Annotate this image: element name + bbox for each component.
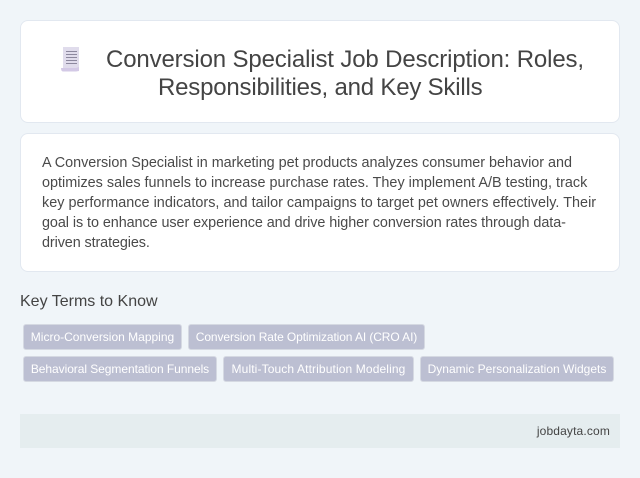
description text: key performance indicators, and tailor campaigns to target pet owners effectively. Their: [42, 195, 596, 211]
description text: driven strategies.: [42, 235, 150, 251]
description text: A Conversion Specialist in marketing pet products analyzes consumer behavior and: [42, 155, 572, 171]
tag: Micro-Conversion Mapping: [31, 330, 174, 344]
footer brand: jobdayta.com: [537, 424, 610, 438]
tag: Behavioral Segmentation Funnels: [31, 362, 209, 376]
panel: title card: [20, 20, 620, 123]
tag: [223, 356, 414, 382]
description text: [42, 155, 596, 251]
footer bar: [20, 414, 620, 448]
tag: Multi-Touch Attribution Modeling: [232, 362, 405, 376]
tag: Conversion Rate Optimization AI (CRO AI): [196, 330, 417, 344]
description text: goal is to enhance user experience and drive higher conversion rates through data-: [42, 215, 566, 231]
panel: description card: [20, 133, 620, 272]
tag: [188, 324, 425, 350]
tag: [23, 324, 182, 350]
tag: [23, 356, 217, 382]
tag: Dynamic Personalization Widgets: [428, 362, 606, 376]
title line 1: Conversion Specialist Job Description: Roles,: [106, 46, 584, 73]
description text: optimizes sales funnels to increase purchase rates. They implement A/B testing, track: [42, 175, 587, 191]
icon: document scroll: [61, 47, 79, 72]
tag: [420, 356, 614, 382]
title line 2: Responsibilities, and Key Skills: [158, 74, 482, 101]
heading: key terms: Key Terms to Know: [20, 293, 158, 310]
